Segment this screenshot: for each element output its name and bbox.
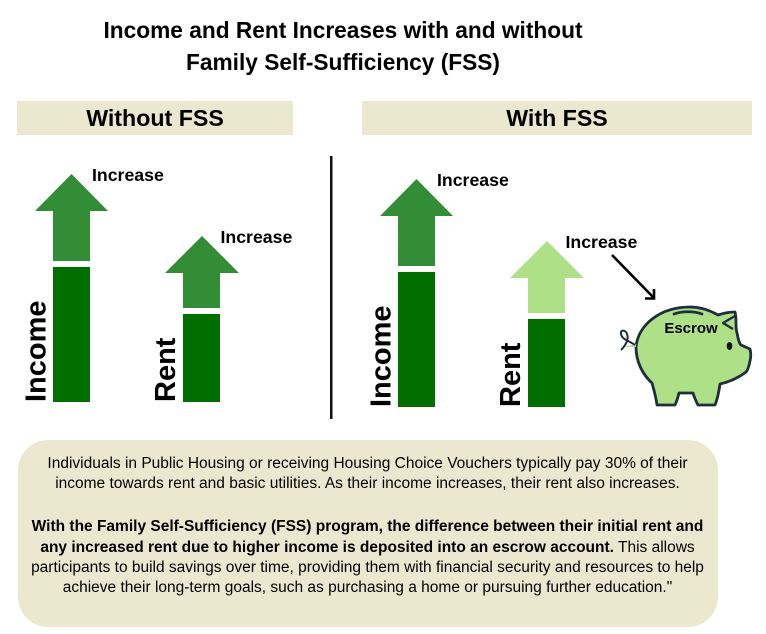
- heading: with FSS: With FSS: [506, 105, 608, 131]
- income bar with increase arrow: [20, 165, 164, 402]
- income bar with increase arrow: Increase: [92, 165, 164, 185]
- income bar with increase arrow: [366, 170, 509, 407]
- icon: piggy bank escrow: [621, 307, 751, 405]
- income bar with increase arrow: Increase: [437, 170, 509, 190]
- text block: FSS explanation: With the Family Self-Sufficiency (FSS) program, the difference between their initial rent and: [32, 518, 703, 535]
- text block: intro: Individuals in Public Housing or receiving Housing Choice Vouchers typically pay 30% of their: [47, 455, 688, 472]
- panel: without FSS: [17, 101, 293, 402]
- title: [103, 17, 583, 75]
- rent bar with increase arrow: Rent: [150, 337, 182, 402]
- rent bar with increase arrow: Increase: [220, 227, 292, 247]
- text block: FSS explanation: participants to build savings over time, providing them with financial security and resources to help: [31, 559, 704, 576]
- rent bar with light increase arrow: [495, 232, 637, 407]
- text block: FSS explanation: any increased rent due to higher income is deposited into an escrow account. This allows: [40, 539, 695, 556]
- heading: without FSS: Without FSS: [86, 105, 224, 131]
- title: Family Self-Sufficiency (FSS): [186, 49, 500, 75]
- title: Income and Rent Increases with and without: [103, 17, 583, 43]
- income bar with increase arrow: Income: [366, 305, 398, 407]
- panel: with FSS: [362, 101, 752, 407]
- heading: with FSS: [362, 101, 752, 135]
- text block: intro: [47, 455, 688, 492]
- heading: without FSS: [17, 101, 293, 135]
- rent bar with light increase arrow: Increase: [566, 232, 637, 252]
- panel: explanation text: [18, 440, 718, 627]
- income bar with increase arrow: Income: [20, 300, 52, 402]
- rent bar with light increase arrow: Rent: [495, 342, 527, 407]
- icon: piggy bank escrow: Escrow: [664, 320, 718, 337]
- rent bar with increase arrow: [150, 227, 292, 402]
- text block: FSS explanation: achieve their long-term goals, such as purchasing a home or pursuing further education.": [63, 579, 672, 596]
- text block: intro: income towards rent and basic utilities. As their income increases, their rent also increases.: [55, 475, 680, 492]
- arrow: increase to escrow: [612, 255, 654, 298]
- text block: FSS explanation: [31, 518, 704, 596]
- divider line: [330, 156, 332, 419]
